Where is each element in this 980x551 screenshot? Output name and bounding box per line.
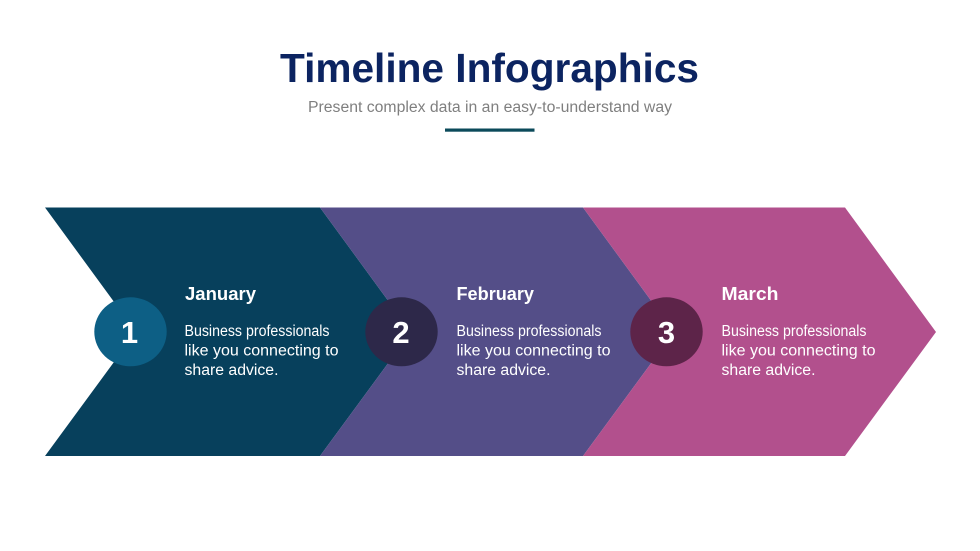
title: Timeline Infographics: [280, 45, 699, 91]
step 1 text: January: Business professionals: [184, 323, 330, 340]
step 3 marker: 3: [658, 315, 675, 350]
subtitle: Present complex data in an easy-to-understand way: [308, 99, 672, 116]
chevron: March: [583, 208, 936, 456]
step 2 text: February: Business professionals: [456, 323, 602, 340]
step 3 text: March: share advice.: [722, 362, 816, 379]
step 2 text: February: February: [456, 283, 535, 304]
step 2 text: February: [456, 283, 610, 379]
step 2 marker: 2: [392, 315, 410, 350]
step 1 text: January: like you connecting to: [184, 342, 338, 360]
step 3 text: March: like you connecting to: [722, 342, 876, 360]
step 2 text: February: share advice.: [456, 362, 550, 379]
step 1 text: January: [184, 283, 338, 379]
title underline: [445, 128, 534, 132]
step 1 marker: 1: [121, 315, 138, 350]
step 2 marker: [365, 297, 438, 366]
step 3 marker: [630, 297, 703, 366]
chevron: January: [45, 208, 411, 456]
step 1 text: January: January: [185, 283, 257, 304]
step 3 text: March: Business professionals: [722, 323, 867, 340]
step 3 text: March: [722, 283, 876, 379]
chevron: February: [320, 208, 674, 456]
step 1 marker: [94, 297, 167, 366]
step 3 text: March: March: [722, 283, 778, 304]
step 1 text: January: share advice.: [184, 362, 278, 379]
step 2 text: February: like you connecting to: [456, 342, 610, 360]
